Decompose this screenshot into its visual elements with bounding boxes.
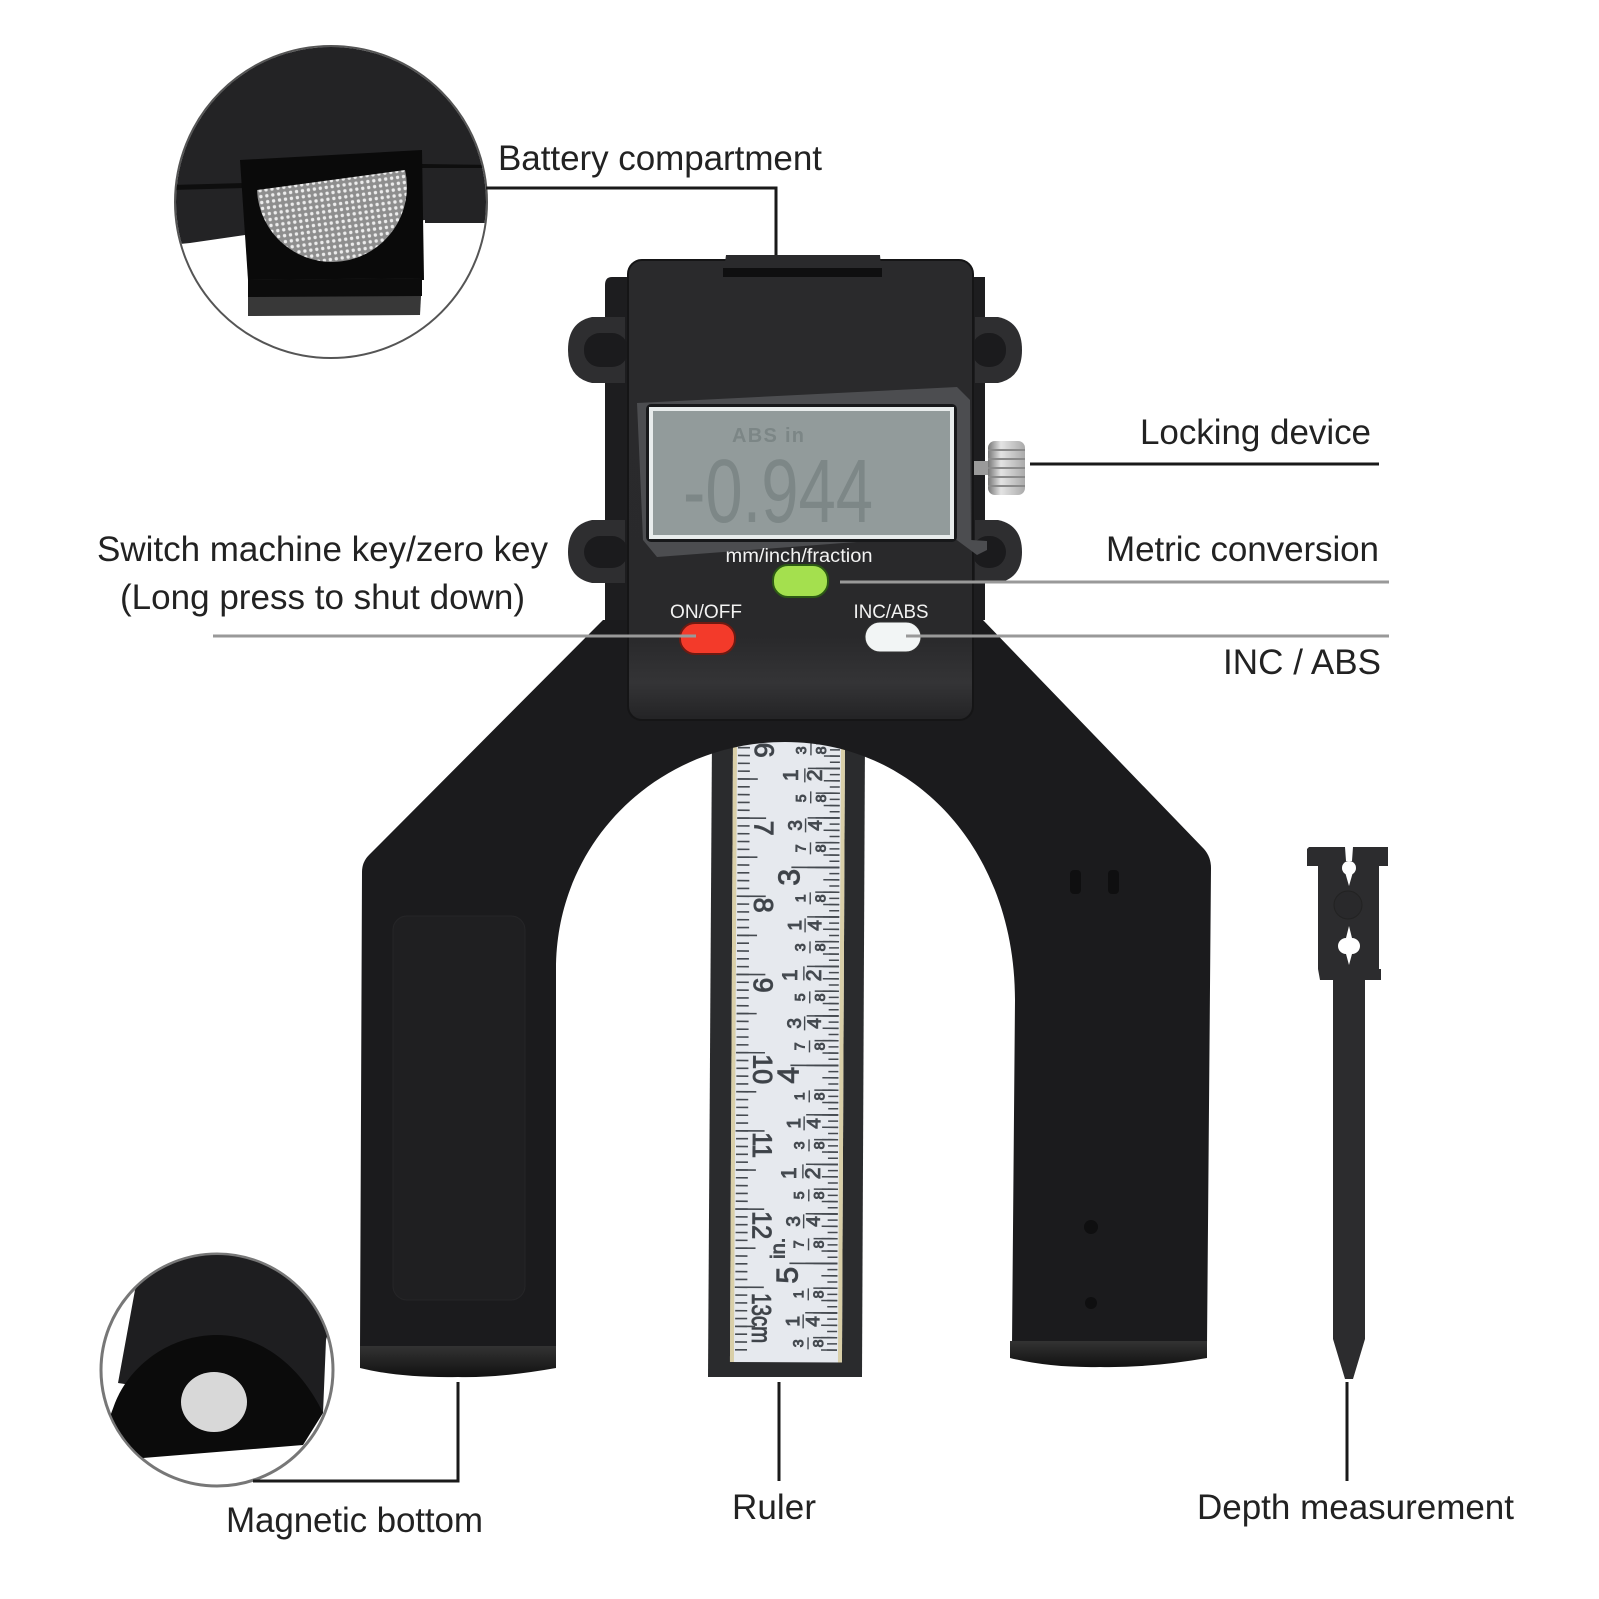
white key (865, 622, 921, 652)
inch fractions: 7 (792, 844, 808, 852)
label: depth measurement: Depth measurement (1197, 1488, 1514, 1527)
centimetre numbers: 6 (749, 743, 779, 758)
LCD screen: -0.944 (683, 442, 873, 542)
inch fractions: 1 (779, 969, 802, 981)
inch fractions: 3 (786, 820, 807, 831)
label: ruler: Ruler (732, 1488, 816, 1527)
upper left ear (568, 317, 625, 383)
callout: magnetic bottom detail (101, 1245, 340, 1486)
inch fractions: 1 (780, 769, 803, 781)
inch numbers: 3 (773, 869, 806, 886)
inch fractions: 3 (791, 1141, 807, 1149)
ruler (708, 731, 865, 1377)
inch fractions: 8 (813, 794, 829, 802)
display housing (628, 260, 973, 720)
inch fractions: 3 (790, 1339, 806, 1347)
label: switch machine key (97, 530, 548, 617)
upper right ear (975, 317, 1022, 383)
LCD screen (651, 409, 952, 542)
inch fractions: 5 (792, 993, 808, 1001)
inch fractions: 5 (791, 1191, 807, 1199)
inch fractions: 4 (806, 820, 827, 831)
inch fractions: 2 (804, 770, 827, 781)
lock screw (973, 441, 1025, 495)
label: battery compartment: Battery compartment (498, 139, 822, 178)
inch numbers: in. (767, 1238, 790, 1259)
inch fractions: 1 (785, 920, 806, 931)
inch fractions: 3 (784, 1216, 805, 1227)
battery cover tab (723, 255, 882, 277)
inch fractions: 3 (793, 746, 809, 754)
LCD screen: ABS in (732, 425, 804, 447)
inch fractions: 8 (812, 943, 828, 951)
recessed panel on left leg (393, 916, 525, 1300)
inch numbers (767, 869, 806, 1284)
inch fractions: 4 (804, 1118, 825, 1129)
key labels (670, 546, 928, 623)
depth measurement pin (1307, 847, 1388, 1379)
inch fractions: 8 (812, 993, 828, 1001)
head backing (605, 277, 985, 620)
inch fractions: 3 (785, 1018, 806, 1029)
key labels: INC/ABS (854, 602, 928, 623)
centimetre numbers: 13cm (746, 1293, 776, 1343)
callout: battery compartment detail (170, 40, 495, 358)
label: switch machine key: (Long press to shut down) (120, 578, 525, 617)
inch fractions: 8 (810, 1339, 826, 1347)
inch fractions: 8 (810, 1290, 826, 1298)
inch fractions: 3 (792, 943, 808, 951)
green key (773, 565, 828, 597)
centimetre numbers: 7 (749, 821, 779, 836)
inch fractions: 1 (783, 1316, 804, 1327)
inch fractions: 8 (811, 1092, 827, 1100)
inch fractions: 8 (811, 1191, 827, 1199)
inch numbers: 5 (771, 1267, 804, 1284)
inch fractions (777, 746, 829, 1347)
leader lines (213, 188, 1389, 1481)
inch fractions: 1 (778, 1167, 801, 1179)
lower left ear (568, 520, 625, 583)
centimetre numbers: 12 (747, 1211, 777, 1239)
label: magnetic bottom: Magnetic bottom (226, 1501, 483, 1540)
inch numbers: 4 (772, 1067, 805, 1084)
inch fractions: 8 (812, 844, 828, 852)
inch fractions: 7 (791, 1240, 807, 1248)
inch fractions: 1 (790, 1290, 806, 1298)
inch fractions: 8 (811, 1240, 827, 1248)
inch fractions: 1 (791, 1092, 807, 1100)
right foot (1010, 1341, 1207, 1367)
inch fractions: 7 (791, 1042, 808, 1050)
protective film (637, 387, 987, 557)
left foot (360, 1346, 556, 1377)
LCD bezel (646, 404, 957, 542)
inch fractions: 8 (813, 746, 829, 754)
inch fractions: 1 (792, 894, 808, 902)
centimetre numbers: 11 (747, 1132, 777, 1158)
centimetre numbers: 8 (748, 898, 778, 913)
inch fractions: 1 (784, 1118, 805, 1129)
inch fractions: 5 (793, 794, 809, 802)
inch fractions: 8 (811, 1141, 827, 1149)
U-shaped frame (360, 620, 1211, 1350)
inch fractions: 4 (805, 920, 826, 931)
slots on right leg (1070, 870, 1119, 1309)
gauge body (360, 255, 1211, 1377)
label: switch machine key: Switch machine key/zero key (97, 530, 548, 569)
red key (680, 623, 735, 654)
centimetre numbers: 9 (748, 978, 778, 993)
lower right ear (975, 520, 1022, 583)
key labels: ON/OFF (670, 602, 742, 623)
label: INC / ABS: INC / ABS (1223, 643, 1381, 682)
inch fractions: 8 (811, 1042, 828, 1050)
inch fractions: 8 (812, 894, 828, 902)
inch fractions: 2 (803, 970, 826, 981)
label: metric conversion: Metric conversion (1106, 530, 1379, 569)
inch fractions: 2 (802, 1167, 825, 1179)
centimetre numbers: 10 (747, 1054, 777, 1084)
label: locking device: Locking device (1140, 413, 1371, 452)
key labels: mm/inch/fraction (726, 546, 872, 567)
inch fractions: 4 (805, 1018, 826, 1029)
centimetre numbers (746, 743, 779, 1343)
inch fractions: 4 (804, 1216, 825, 1227)
inch fractions: 4 (803, 1316, 824, 1327)
